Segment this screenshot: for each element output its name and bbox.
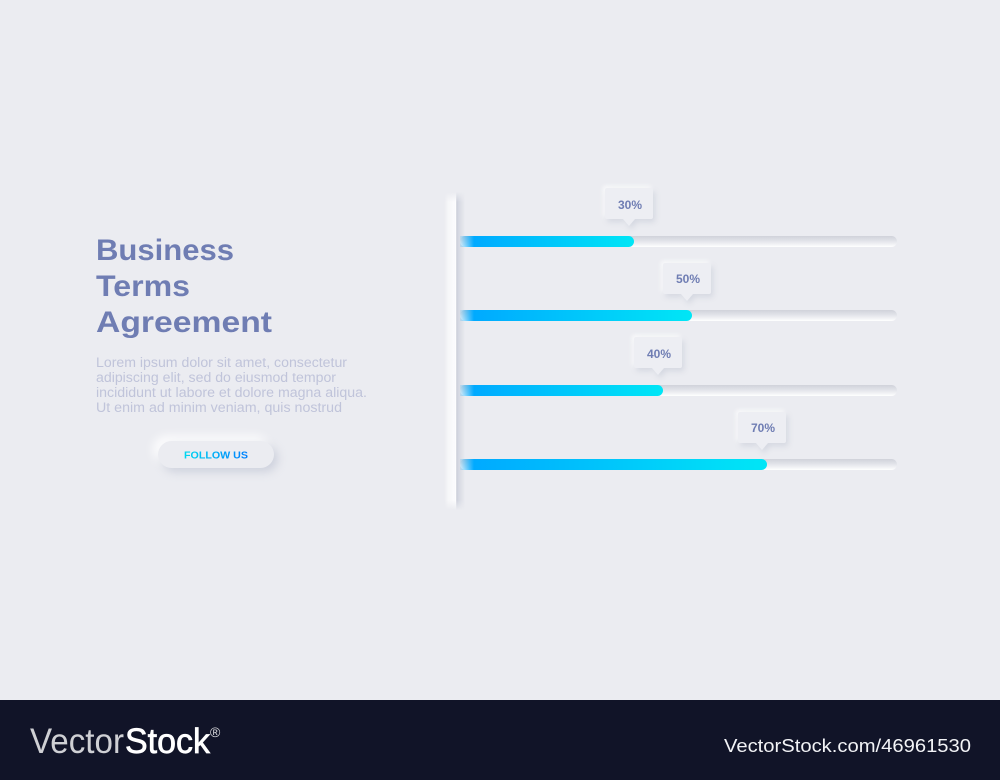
callout: 30% (604, 186, 656, 228)
footer band (0, 700, 1000, 780)
callout: 30%: 30% (618, 198, 642, 212)
body text: incididunt ut labore et dolore magna aliqua. (96, 385, 367, 400)
callout: 40%: 40% (647, 347, 671, 361)
logo: VectorStock (30, 722, 221, 761)
title: Business (96, 234, 234, 267)
button: follow us: FOLLOW US (184, 450, 248, 462)
bar: 30% (460, 236, 897, 247)
body text: Lorem ipsum dolor sit amet, consectetur (96, 355, 348, 370)
bar: 50% (460, 310, 897, 321)
title: Terms (96, 270, 190, 303)
body text: Ut enim ad minim veniam, quis nostrud (96, 400, 342, 415)
vertical axis bar (447, 194, 462, 508)
logo: VectorStock: Vector (30, 722, 124, 761)
logo: VectorStock: Stock (125, 722, 210, 761)
body text (96, 355, 367, 415)
title (96, 234, 272, 339)
callout: 40% (632, 336, 686, 377)
bar: 70% (460, 459, 897, 470)
bar: 40% (460, 385, 897, 396)
callout: 50% (662, 262, 714, 303)
callout: 50%: 50% (676, 272, 700, 286)
title: Agreement (96, 306, 272, 339)
body text: adipiscing elit, sed do eiusmod tempor (96, 370, 337, 385)
button: follow us (158, 441, 274, 468)
logo: VectorStock: ® (210, 724, 221, 740)
callout: 70%: 70% (751, 421, 775, 435)
footer url: VectorStock.com/46961530 (724, 736, 971, 756)
callout: 70% (736, 410, 790, 452)
